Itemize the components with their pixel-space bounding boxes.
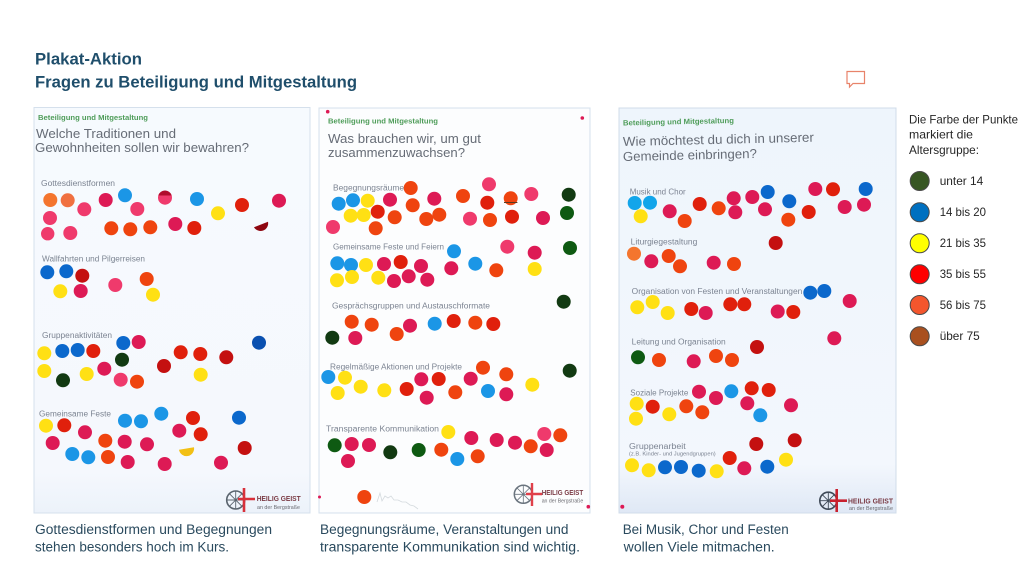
legend heading: Die Farbe der Punkte [909,112,1018,126]
caption: second poster: transparente Kommunikation sind wichtig. [320,540,580,555]
legend heading [909,112,1018,157]
row: Gruppenaktivitaeten: Gruppenaktivitäten [42,331,112,340]
legend item: ueber 75 [910,327,980,346]
caption: first poster: Gottesdienstformen und Begegnungen [35,522,272,537]
row: Gruppenarbeit: Gruppenarbeit [629,442,687,451]
logo: HEILIG GEIST [542,490,584,497]
poster question: Gemeinde einbringen? [623,146,757,164]
logo: an der Bergstraße [849,506,893,512]
poster tag: Beteiligung und Mitgestaltung [623,116,734,127]
panel: poster getting involved [619,108,896,513]
row: Transparente Kommunikation: Transparente Kommunikation [326,425,439,434]
caption: first poster: stehen besonders hoch im Kurs. [35,540,229,555]
row: Transparente Kommunikation [326,425,567,468]
legend item: unter 14 [910,172,984,190]
row: Musik und Chor [628,182,873,228]
legend item: 14 bis 20: 14 bis 20 [940,205,986,219]
legend: age groups [909,112,1018,346]
row: Gemeinsame Feste und Feiern [330,240,577,288]
row: Liturgiegestaltung [627,236,783,273]
poster question: Wie möchtest du dich in unserer [623,130,815,149]
row: Organisation von Festen und Veranstaltungen: Organisation von Festen und Veranstaltungen [632,287,802,296]
row: Gottesdienstformen [41,179,286,240]
caption: second poster [320,522,580,555]
poster question: zusammenzuwachsen? [328,145,465,160]
panel: poster traditions [34,108,310,513]
poster question [623,130,815,164]
handwritten note with dot [357,490,418,509]
row: Regelmaessige Aktionen und Projekte: Regelmäßige Aktionen und Projekte [330,362,463,371]
title: Plakat-Aktion [35,49,142,68]
row: Gemeinsame Feste: Gemeinsame Feste [39,410,112,419]
row: Gemeinsame Feste und Feiern: Gemeinsame Feste und Feiern [333,243,444,252]
icon: comment bubble [847,72,864,87]
caption: third poster: Bei Musik, Chor und Festen [623,522,789,537]
poster tag: Beteiligung und Mitgestaltung [38,113,148,122]
title: Fragen zu Beteiligung und Mitgestaltung [35,73,357,92]
logo: HEILIG GEIST [257,496,301,503]
row: Begegnungsraeume [326,177,576,235]
legend item: 21 bis 35: 21 bis 35 [940,236,986,250]
row: Gruppenarbeit: (z.B. Kinder- und Jugendgruppen) [629,452,716,458]
row: Gespraechsgruppen und Austauschformate [325,295,571,345]
caption: third poster [623,522,789,555]
title [35,49,357,92]
row: Leitung und Organisation: Leitung und Organisation [632,337,726,346]
row: Gottesdienstformen: Gottesdienstformen [41,179,115,188]
legend item: 56 bis 75 [910,296,986,314]
caption: second poster: Begegnungsräume, Veranstaltungen und [320,522,568,537]
legend item: 35 bis 55 [910,265,986,284]
logo: an der Bergstraße [542,499,583,505]
logo: HEILIG GEIST [848,499,894,506]
poster question [328,131,481,160]
legend item: ueber 75: über 75 [940,329,980,343]
row: Begegnungsraeume: Begegnungsräume [333,184,405,193]
legend item: 21 bis 35 [910,234,986,253]
row: Regelmaessige Aktionen und Projekte [321,361,577,405]
row: Wallfahrten und Pilgerreisen [40,255,160,302]
legend heading: Altersgruppe: [909,143,979,157]
legend heading: markiert die [909,128,973,142]
row: Soziale Projekte: Soziale Projekte [630,389,689,398]
row: Soziale Projekte [629,381,798,426]
poster question [35,126,249,155]
legend item: unter 14: unter 14 [940,174,984,188]
row: Leitung und Organisation [631,331,841,368]
row: Gespraechsgruppen und Austauschformate: Gesprächsgruppen und Austauschformate [332,302,491,311]
caption: third poster: wollen Viele mitmachen. [623,540,775,555]
row: Gruppenarbeit [625,433,802,478]
row: Gruppenaktivitaeten [37,331,266,389]
panel: poster growing together [318,108,590,513]
logo [514,483,584,506]
row: Organisation von Festen und Veranstaltungen [630,284,857,320]
poster question: Gewohnheiten sollen wir bewahren? [35,140,249,155]
poster tag: Beteiligung und Mitgestaltung [328,116,438,125]
poster question: Was brauchen wir, um gut [328,131,481,146]
row: Wallfahrten und Pilgerreisen: Wallfahrten und Pilgerreisen [42,255,145,264]
pin mark [620,505,624,509]
legend item: 56 bis 75: 56 bis 75 [940,298,986,312]
row: Liturgiegestaltung: Liturgiegestaltung [631,237,697,246]
logo [227,488,301,512]
legend item: 35 bis 55: 35 bis 55 [940,267,986,281]
row: Musik und Chor: Musik und Chor [630,187,686,196]
logo: an der Bergstraße [257,505,300,511]
legend item: 14 bis 20 [910,203,986,222]
logo [820,489,894,512]
pin marks [318,110,590,509]
row: Gemeinsame Feste [39,407,252,471]
poster question: Welche Traditionen und [36,126,176,141]
caption: first poster [35,522,272,555]
